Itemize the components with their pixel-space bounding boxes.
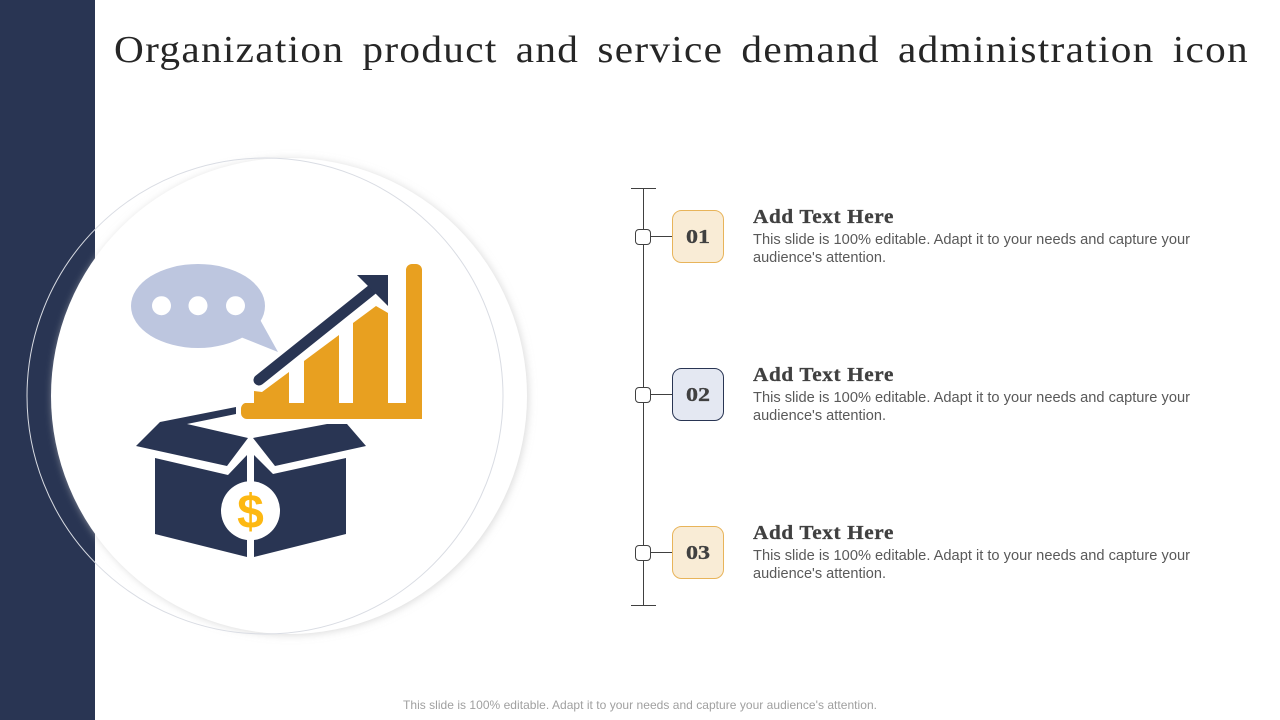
icon: growth arrow [259,275,388,380]
number badge: 03 [686,542,710,564]
number badge [672,526,724,578]
body text: This slide is 100% editable. Adapt it to your needs and capture your [753,390,1190,406]
thin outline ring [27,158,503,634]
number badge: 02 [686,384,710,406]
icon: dollar coin: $ [237,486,264,539]
left sidebar [0,0,95,720]
circle graphic [27,158,527,634]
step 02: audience's attention. [753,408,886,424]
heading: Add Text Here [753,206,894,228]
number badge [672,368,724,420]
step 03: audience's attention. [753,566,886,582]
number badge [672,210,724,262]
title: Organization product and service demand administration icon [114,29,1249,71]
footer note: This slide is 100% editable. Adapt it to your needs and capture your audience's attention. [403,698,877,712]
icon: open box [136,407,366,557]
icon: product box with growth chart [131,264,422,557]
step 01 [636,206,1190,266]
number badge: 01 [686,226,710,248]
body text: This slide is 100% editable. Adapt it to your needs and capture your [753,232,1190,248]
step 03 [636,522,1190,582]
timeline [631,188,656,606]
heading: Add Text Here [753,522,894,544]
icon: bar chart [241,264,422,419]
heading: Add Text Here [753,364,894,386]
body text: This slide is 100% editable. Adapt it to your needs and capture your [753,548,1190,564]
connector [636,230,672,244]
icon: speech bubble [131,264,278,352]
icon: dollar coin [221,481,280,540]
step 02 [636,364,1190,424]
connector [636,546,672,560]
white disc with shadow [51,158,527,634]
connector [636,388,672,402]
step 01: audience's attention. [753,250,886,266]
